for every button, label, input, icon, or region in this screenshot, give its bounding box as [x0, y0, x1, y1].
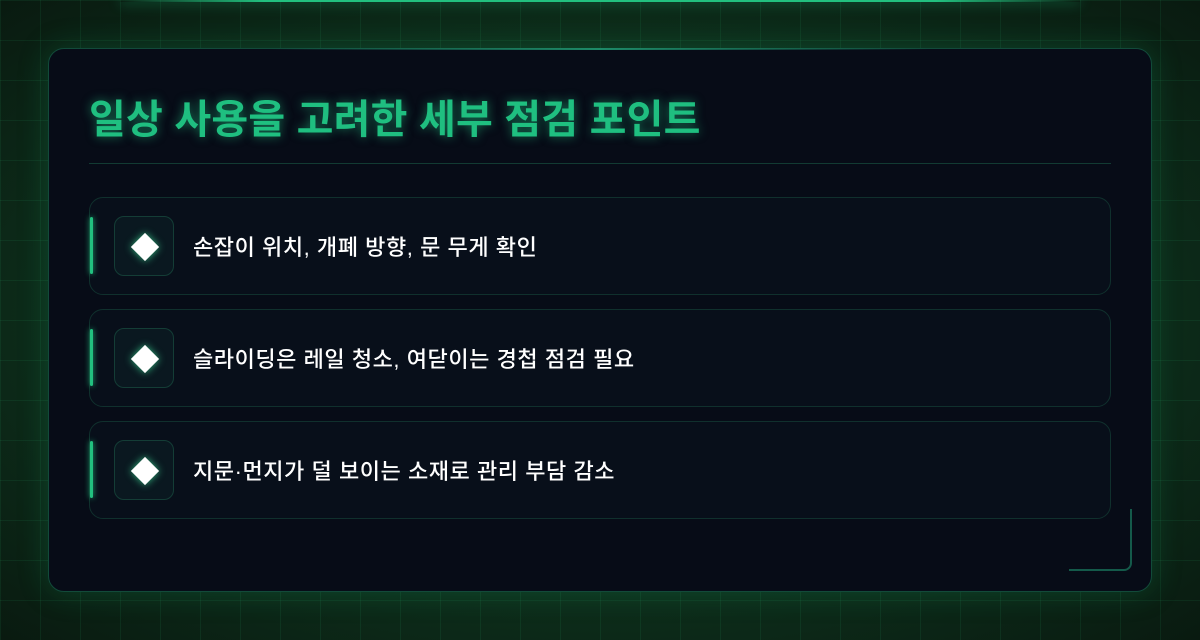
- panel: main card: [48, 48, 1152, 592]
- title: 일상 사용을 고려한 세부 점검 포인트: [89, 98, 701, 142]
- corner bracket: [1069, 509, 1132, 571]
- item 3: [89, 421, 1111, 519]
- text: item 2: 슬라이딩은 레일 청소, 여닫이는 경첩 점검 필요: [193, 347, 635, 372]
- item 1: [89, 197, 1111, 295]
- text: item 3: 지문·먼지가 덜 보이는 소재로 관리 부담 감소: [193, 459, 615, 484]
- text: item 1: 손잡이 위치, 개폐 방향, 문 무게 확인: [193, 235, 537, 260]
- icon: diamond: [114, 440, 174, 500]
- item 2: [89, 309, 1111, 407]
- icon: diamond: [114, 216, 174, 276]
- icon: diamond: [114, 328, 174, 388]
